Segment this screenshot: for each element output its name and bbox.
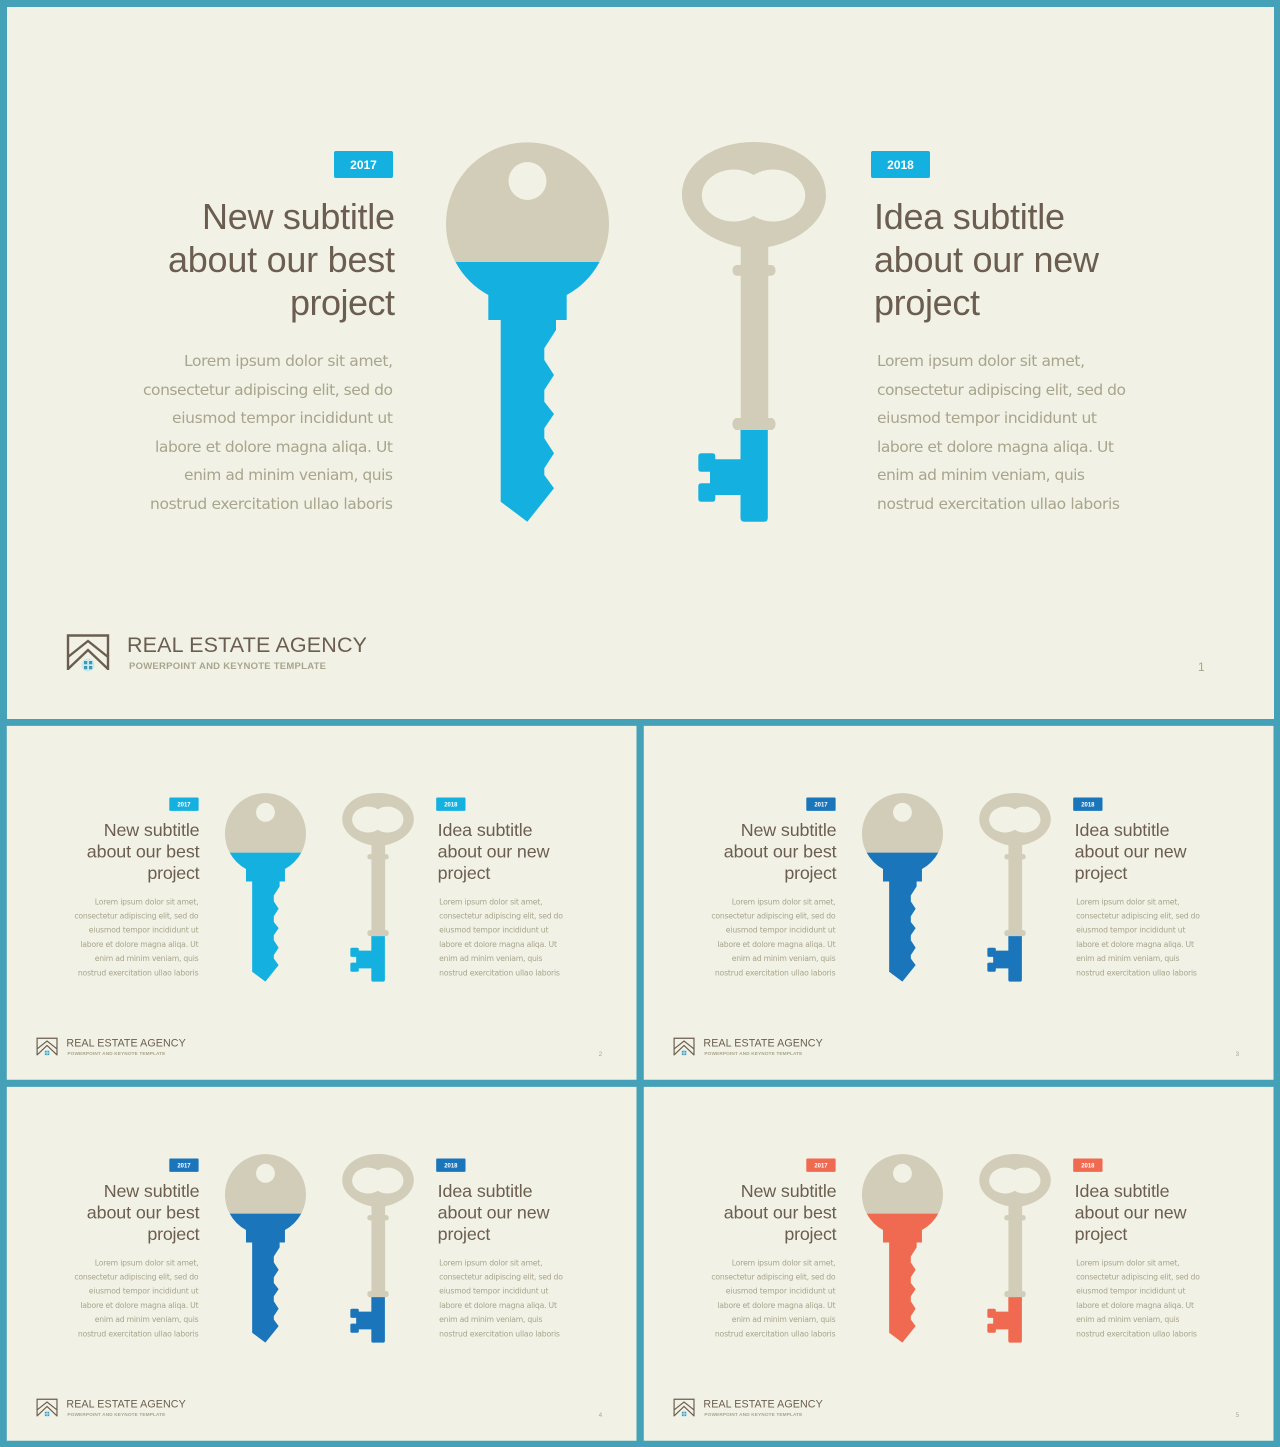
brand tagline: POWERPOINT AND KEYNOTE TEMPLATE <box>67 1412 165 1418</box>
brand name: REAL ESTATE AGENCY <box>66 1398 186 1410</box>
heading: left subtitle: about our best <box>87 842 200 862</box>
badge: 2017: 2017 <box>814 1163 828 1169</box>
text block: left description: enim ad minim veniam, quis <box>732 954 836 963</box>
text block: right description: enim ad minim veniam, quis <box>877 466 1085 484</box>
icon: round key <box>862 1154 943 1343</box>
badge: 2017: 2017 <box>177 1163 191 1169</box>
badge: 2017 <box>806 1158 836 1172</box>
text block: left description: nostrud exercitation ullao laboris <box>715 968 836 977</box>
badge: 2018 <box>871 151 930 178</box>
page number: 4 <box>599 1413 603 1419</box>
heading: right subtitle: project <box>438 863 490 883</box>
text block: left description <box>711 1258 836 1338</box>
panel: slide 2 <box>7 726 636 1080</box>
heading: left subtitle <box>724 820 837 883</box>
heading: right subtitle <box>438 1181 550 1244</box>
badge: 2018 <box>1073 797 1103 811</box>
text block: left description: consectetur adipiscing elit, sed do <box>74 912 199 921</box>
text block: right description: eiusmod tempor incididunt ut <box>877 409 1097 427</box>
icon: agency logo <box>37 1399 57 1417</box>
heading: left subtitle: New subtitle <box>202 196 395 237</box>
text block: left description: nostrud exercitation ullao laboris <box>715 1329 836 1338</box>
text block: left description: eiusmod tempor incididunt ut <box>726 1287 836 1296</box>
text block: right description: nostrud exercitation ullao laboris <box>1076 968 1197 977</box>
icon: skeleton key <box>979 1154 1051 1343</box>
text block: right description: consectetur adipiscing elit, sed do <box>877 381 1126 399</box>
text block: right description <box>439 897 563 977</box>
text block: right description: labore et dolore magna aliqa. Ut <box>439 1301 557 1310</box>
text block: right description: eiusmod tempor incididunt ut <box>1076 1287 1186 1296</box>
icon: skeleton key <box>342 1154 414 1343</box>
page number: 1 <box>1198 660 1205 674</box>
panel: slide 4 <box>7 1087 636 1441</box>
heading: left subtitle: project <box>290 282 395 323</box>
heading: left subtitle: New subtitle <box>104 1181 200 1201</box>
badge: 2017: 2017 <box>177 802 191 808</box>
text block: left description: labore et dolore magna aliqa. Ut <box>80 1301 199 1310</box>
text block: right description: eiusmod tempor incididunt ut <box>439 1287 549 1296</box>
heading: right subtitle <box>1075 820 1187 883</box>
heading: left subtitle: project <box>147 863 200 883</box>
panel: slide 1 <box>7 7 1274 719</box>
text block: right description <box>1076 1258 1200 1338</box>
text block: left description: enim ad minim veniam, quis <box>184 466 393 484</box>
text block: left description: labore et dolore magna aliqa. Ut <box>717 1301 836 1310</box>
page number: 3 <box>1236 1052 1240 1058</box>
badge: 2017: 2017 <box>350 158 377 172</box>
text block: left description: nostrud exercitation ullao laboris <box>150 495 393 513</box>
icon: round key <box>225 1154 306 1343</box>
brand name: REAL ESTATE AGENCY <box>703 1398 823 1410</box>
text block: right description: nostrud exercitation ullao laboris <box>1076 1329 1197 1338</box>
text block: left description <box>74 897 199 977</box>
brand tagline: POWERPOINT AND KEYNOTE TEMPLATE <box>129 661 326 672</box>
heading: left subtitle: New subtitle <box>741 820 837 840</box>
text block: right description: consectetur adipiscing elit, sed do <box>439 1273 563 1282</box>
text block: right description: eiusmod tempor incididunt ut <box>1076 926 1186 935</box>
text block: right description: labore et dolore magna aliqa. Ut <box>1076 940 1194 949</box>
badge: 2018: 2018 <box>444 802 458 808</box>
heading: left subtitle <box>87 1181 200 1244</box>
badge: 2018: 2018 <box>887 158 914 172</box>
heading: left subtitle: about our best <box>168 239 395 280</box>
heading: left subtitle <box>87 820 200 883</box>
text block: left description <box>143 352 393 513</box>
heading: left subtitle: project <box>147 1224 200 1244</box>
badge: 2018 <box>436 1158 466 1172</box>
heading: right subtitle: Idea subtitle <box>1075 1181 1170 1201</box>
heading: right subtitle <box>874 196 1100 323</box>
icon: round key <box>225 793 306 982</box>
badge: 2017 <box>169 1158 199 1172</box>
icon: skeleton key <box>342 793 414 982</box>
text block: left description: Lorem ipsum dolor sit amet, <box>732 1258 836 1267</box>
badge: 2017 <box>334 151 393 178</box>
heading: right subtitle: Idea subtitle <box>438 820 533 840</box>
text block: right description: Lorem ipsum dolor sit amet, <box>439 897 543 906</box>
brand name: REAL ESTATE AGENCY <box>127 633 367 657</box>
page number: 2 <box>599 1052 603 1058</box>
heading: right subtitle <box>438 820 550 883</box>
heading: right subtitle: Idea subtitle <box>438 1181 533 1201</box>
text block: left description: eiusmod tempor incididunt ut <box>172 409 393 427</box>
panel: slide 3 <box>644 726 1273 1080</box>
heading: left subtitle: about our best <box>724 1203 837 1223</box>
badge: 2018: 2018 <box>1081 802 1095 808</box>
heading: right subtitle: project <box>1075 1224 1127 1244</box>
text block: left description: nostrud exercitation ullao laboris <box>78 968 199 977</box>
text block: right description: Lorem ipsum dolor sit amet, <box>1076 897 1180 906</box>
text block: left description: consectetur adipiscing elit, sed do <box>711 1273 836 1282</box>
text block: right description: labore et dolore magna aliqa. Ut <box>439 940 557 949</box>
text block: right description: nostrud exercitation ullao laboris <box>439 968 560 977</box>
icon: agency logo <box>37 1038 57 1056</box>
heading: left subtitle: about our best <box>724 842 837 862</box>
text block: right description: Lorem ipsum dolor sit amet, <box>877 352 1085 370</box>
text block: right description: consectetur adipiscing elit, sed do <box>1076 1273 1200 1282</box>
page number: 5 <box>1236 1413 1240 1419</box>
brand tagline: POWERPOINT AND KEYNOTE TEMPLATE <box>704 1412 802 1418</box>
icon: round key <box>862 793 943 982</box>
heading: left subtitle: about our best <box>87 1203 200 1223</box>
text block: left description <box>711 897 836 977</box>
icon: skeleton key <box>979 793 1051 982</box>
badge: 2017 <box>806 797 836 811</box>
text block: right description: nostrud exercitation ullao laboris <box>877 495 1120 513</box>
text block: left description: enim ad minim veniam, quis <box>95 1315 199 1324</box>
heading: right subtitle: project <box>1075 863 1127 883</box>
text block: right description: enim ad minim veniam, quis <box>1076 954 1180 963</box>
heading: left subtitle <box>724 1181 837 1244</box>
heading: right subtitle: about our new <box>438 842 550 862</box>
text block: left description: eiusmod tempor incididunt ut <box>89 926 199 935</box>
text block: right description: eiusmod tempor incididunt ut <box>439 926 549 935</box>
text block: left description: Lorem ipsum dolor sit amet, <box>732 897 836 906</box>
text block: left description: labore et dolore magna aliqa. Ut <box>155 438 393 456</box>
text block: right description: enim ad minim veniam, quis <box>439 1315 543 1324</box>
text block: right description: consectetur adipiscing elit, sed do <box>1076 912 1200 921</box>
text block: right description: enim ad minim veniam, quis <box>1076 1315 1180 1324</box>
heading: right subtitle: about our new <box>1075 1203 1187 1223</box>
text block: left description: Lorem ipsum dolor sit amet, <box>184 352 393 370</box>
text block: left description: Lorem ipsum dolor sit amet, <box>95 1258 199 1267</box>
heading: right subtitle: Idea subtitle <box>874 196 1065 237</box>
icon: skeleton key <box>682 142 826 522</box>
icon: agency logo <box>68 636 108 672</box>
text block: right description: labore et dolore magna aliqa. Ut <box>1076 1301 1194 1310</box>
heading: right subtitle: project <box>874 282 980 323</box>
text block: left description: labore et dolore magna aliqa. Ut <box>717 940 836 949</box>
heading: left subtitle: project <box>784 863 837 883</box>
badge: 2018 <box>1073 1158 1103 1172</box>
heading: left subtitle <box>168 196 395 323</box>
heading: right subtitle <box>1075 1181 1187 1244</box>
brand name: REAL ESTATE AGENCY <box>703 1037 823 1049</box>
badge: 2018: 2018 <box>444 1163 458 1169</box>
heading: right subtitle: project <box>438 1224 490 1244</box>
text block: right description <box>1076 897 1200 977</box>
brand tagline: POWERPOINT AND KEYNOTE TEMPLATE <box>704 1051 802 1057</box>
icon: agency logo <box>674 1399 694 1417</box>
heading: left subtitle: New subtitle <box>104 820 200 840</box>
badge: 2017 <box>169 797 199 811</box>
text block: left description <box>74 1258 199 1338</box>
text block: left description: eiusmod tempor incididunt ut <box>89 1287 199 1296</box>
icon: round key <box>446 142 609 522</box>
text block: left description: eiusmod tempor incididunt ut <box>726 926 836 935</box>
brand tagline: POWERPOINT AND KEYNOTE TEMPLATE <box>67 1051 165 1057</box>
text block: right description: nostrud exercitation ullao laboris <box>439 1329 560 1338</box>
text block: right description: Lorem ipsum dolor sit amet, <box>1076 1258 1180 1267</box>
badge: 2018: 2018 <box>1081 1163 1095 1169</box>
icon: agency logo <box>674 1038 694 1056</box>
text block: left description: consectetur adipiscing elit, sed do <box>74 1273 199 1282</box>
text block: left description: Lorem ipsum dolor sit amet, <box>95 897 199 906</box>
panel: slide 5 <box>644 1087 1273 1441</box>
badge: 2018 <box>436 797 466 811</box>
heading: right subtitle: about our new <box>1075 842 1187 862</box>
text block: right description <box>439 1258 563 1338</box>
heading: right subtitle: Idea subtitle <box>1075 820 1170 840</box>
text block: left description: enim ad minim veniam, quis <box>95 954 199 963</box>
heading: right subtitle: about our new <box>438 1203 550 1223</box>
brand name: REAL ESTATE AGENCY <box>66 1037 186 1049</box>
heading: right subtitle: about our new <box>874 239 1100 280</box>
heading: left subtitle: project <box>784 1224 837 1244</box>
text block: left description: enim ad minim veniam, quis <box>732 1315 836 1324</box>
heading: left subtitle: New subtitle <box>741 1181 837 1201</box>
text block: right description: labore et dolore magna aliqa. Ut <box>877 438 1114 456</box>
text block: right description: consectetur adipiscing elit, sed do <box>439 912 563 921</box>
text block: left description: labore et dolore magna aliqa. Ut <box>80 940 199 949</box>
text block: left description: consectetur adipiscing elit, sed do <box>711 912 836 921</box>
text block: right description <box>877 352 1126 513</box>
text block: left description: nostrud exercitation ullao laboris <box>78 1329 199 1338</box>
text block: left description: consectetur adipiscing elit, sed do <box>143 381 393 399</box>
text block: right description: Lorem ipsum dolor sit amet, <box>439 1258 543 1267</box>
badge: 2017: 2017 <box>814 802 828 808</box>
text block: right description: enim ad minim veniam, quis <box>439 954 543 963</box>
